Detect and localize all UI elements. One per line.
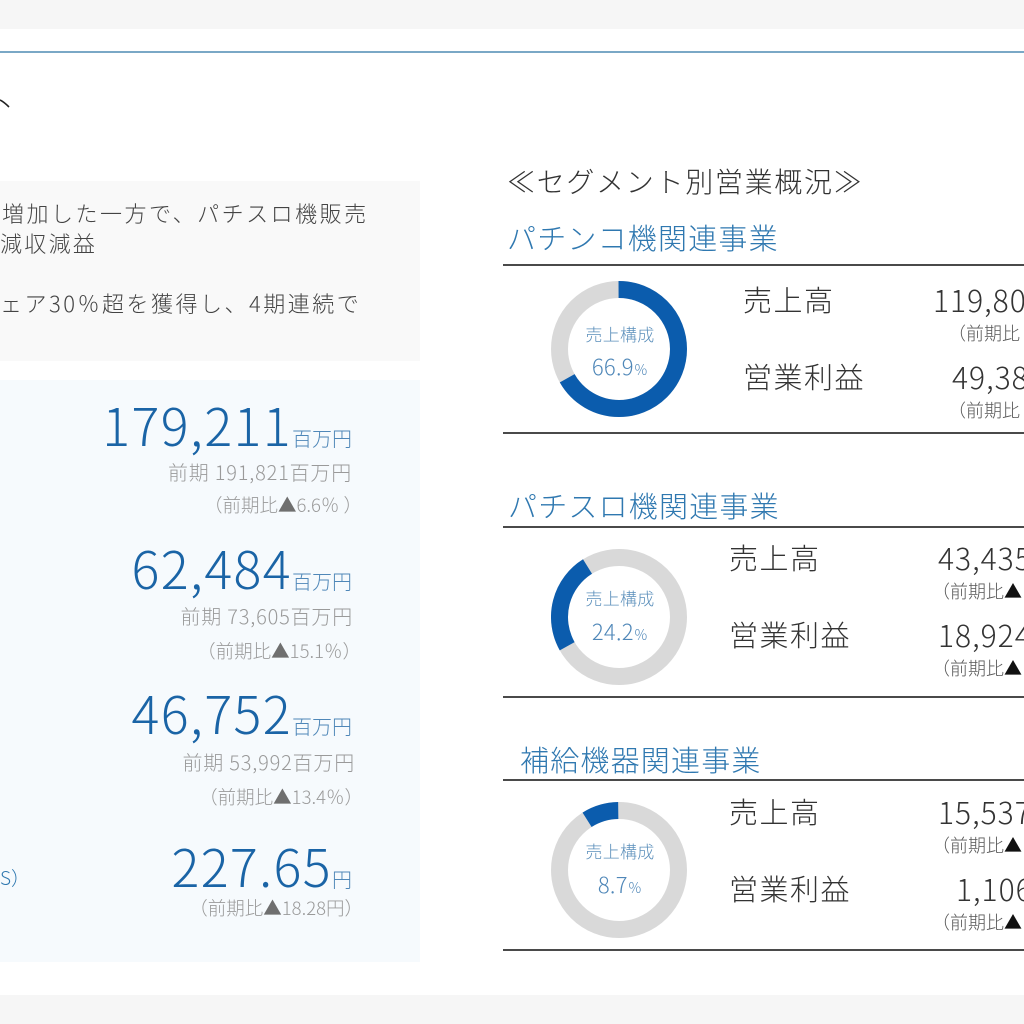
- bottom rule: [503, 432, 1024, 434]
- EPS change: （前期比▲18.28円）: [189, 895, 363, 921]
- net profit previous: 前期 53,992百万円: [182, 747, 355, 776]
- net sales figure: 179,211百万円: [102, 386, 352, 461]
- donut chart 8.7%: [551, 802, 687, 938]
- donut chart 24.2%: 24.2％: [592, 615, 648, 647]
- top rule: [503, 779, 1024, 781]
- donut chart 24.2%: [551, 549, 687, 685]
- sales label: 売上高: [729, 536, 821, 578]
- operating profit figure: 62,484百万円: [131, 529, 352, 604]
- donut chart 24.2%: 売上構成: [585, 585, 655, 610]
- summary line 3: ェア30％超を獲得し、4期連続で: [0, 287, 361, 319]
- top band: [0, 0, 1024, 29]
- bottom rule: [503, 949, 1024, 951]
- net sales change: （前期比▲6.6％ ）: [204, 492, 362, 518]
- donut chart 66.9%: [551, 281, 687, 417]
- header rule: [0, 51, 1024, 53]
- donut chart 66.9%: 66.9％: [592, 350, 648, 382]
- sales change: （前期比▲: [932, 832, 1022, 858]
- donut chart 8.7%: 8.7％: [598, 868, 642, 900]
- operating profit previous: 前期 73,605百万円: [180, 601, 353, 630]
- pachislot heading: パチスロ機関連事業: [508, 484, 780, 526]
- profit label: 営業利益: [729, 613, 851, 655]
- sales change: （前期比▲: [932, 578, 1022, 604]
- profit change: （前期比▲: [932, 655, 1022, 681]
- profit change: （前期比▲: [932, 909, 1022, 935]
- sales label: 売上高: [729, 790, 821, 832]
- summary line 1: 増加した一方で、パチスロ機販売: [2, 197, 369, 229]
- summary line 2: 減収減益: [0, 227, 97, 259]
- panel: pachinko segment: [503, 216, 1024, 434]
- panel: pachislot segment: [503, 484, 1024, 698]
- sales change: （前期比: [948, 320, 1020, 346]
- operating profit change: （前期比▲15.1％）: [197, 638, 361, 664]
- net profit change: （前期比▲13.4％）: [199, 784, 363, 810]
- sales label: 売上高: [743, 278, 835, 320]
- supply heading: 補給機器関連事業: [520, 738, 762, 780]
- EPS label: S）: [0, 864, 30, 891]
- EPS figure: 227.65円: [171, 827, 352, 902]
- bottom rule: [503, 696, 1024, 698]
- profit label: 営業利益: [729, 867, 851, 909]
- title fragment: [0, 99, 10, 108]
- net profit figure: 46,752百万円: [131, 674, 352, 749]
- net sales previous: 前期 191,821百万円: [168, 457, 352, 486]
- donut chart 66.9%: 売上構成: [585, 321, 655, 346]
- panel: summary text: [0, 181, 420, 361]
- top rule: [503, 264, 1024, 266]
- profit label: 営業利益: [743, 355, 865, 397]
- bottom band: [0, 995, 1024, 1024]
- profit change: （前期比: [948, 397, 1020, 423]
- donut chart 8.7%: 売上構成: [585, 838, 655, 863]
- panel: supply equipment segment: [503, 738, 1024, 951]
- top rule: [503, 526, 1024, 528]
- pachinko heading: パチンコ機関連事業: [507, 216, 779, 258]
- segment heading: ≪セグメント別営業概況≫: [507, 161, 863, 201]
- panel: key figures: [0, 380, 420, 962]
